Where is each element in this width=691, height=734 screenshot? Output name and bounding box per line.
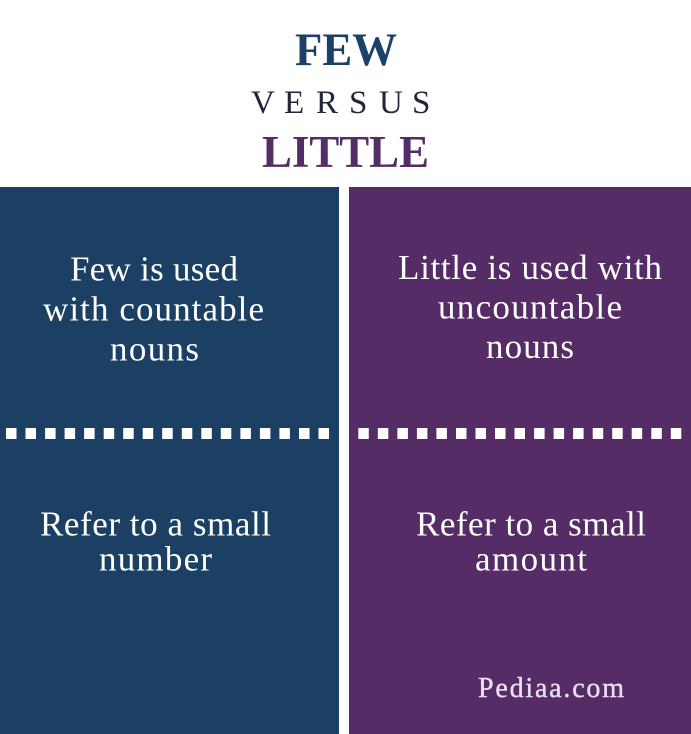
text: few usage: Few is used [70, 250, 238, 288]
subtitle: versus: VERSUS [251, 85, 430, 121]
panel: little [349, 187, 691, 734]
text: few usage [43, 250, 264, 368]
title: few: FEW [295, 24, 397, 76]
logo: pediaa.com: Pediaa.com [478, 673, 624, 704]
text: little meaning [416, 504, 646, 578]
text: little meaning: amount [475, 540, 587, 578]
divider: few [6, 428, 329, 439]
text: little usage [398, 248, 662, 366]
title: little: LITTLE [262, 127, 429, 177]
text: little usage: uncountable [438, 288, 622, 326]
panel background: few [0, 187, 339, 734]
text: few meaning [40, 504, 271, 578]
text: few usage: nouns [110, 330, 199, 368]
text: little meaning: Refer to a small [416, 504, 646, 544]
panel background: little [349, 187, 691, 734]
text: little usage: Little is used with [398, 248, 662, 287]
header [251, 24, 430, 177]
text: few meaning: number [99, 540, 212, 578]
panel: few [0, 187, 339, 734]
divider: little [358, 428, 681, 439]
text: few usage: with countable [43, 290, 264, 328]
text: little usage: nouns [486, 327, 574, 366]
text: few meaning: Refer to a small [40, 504, 271, 544]
